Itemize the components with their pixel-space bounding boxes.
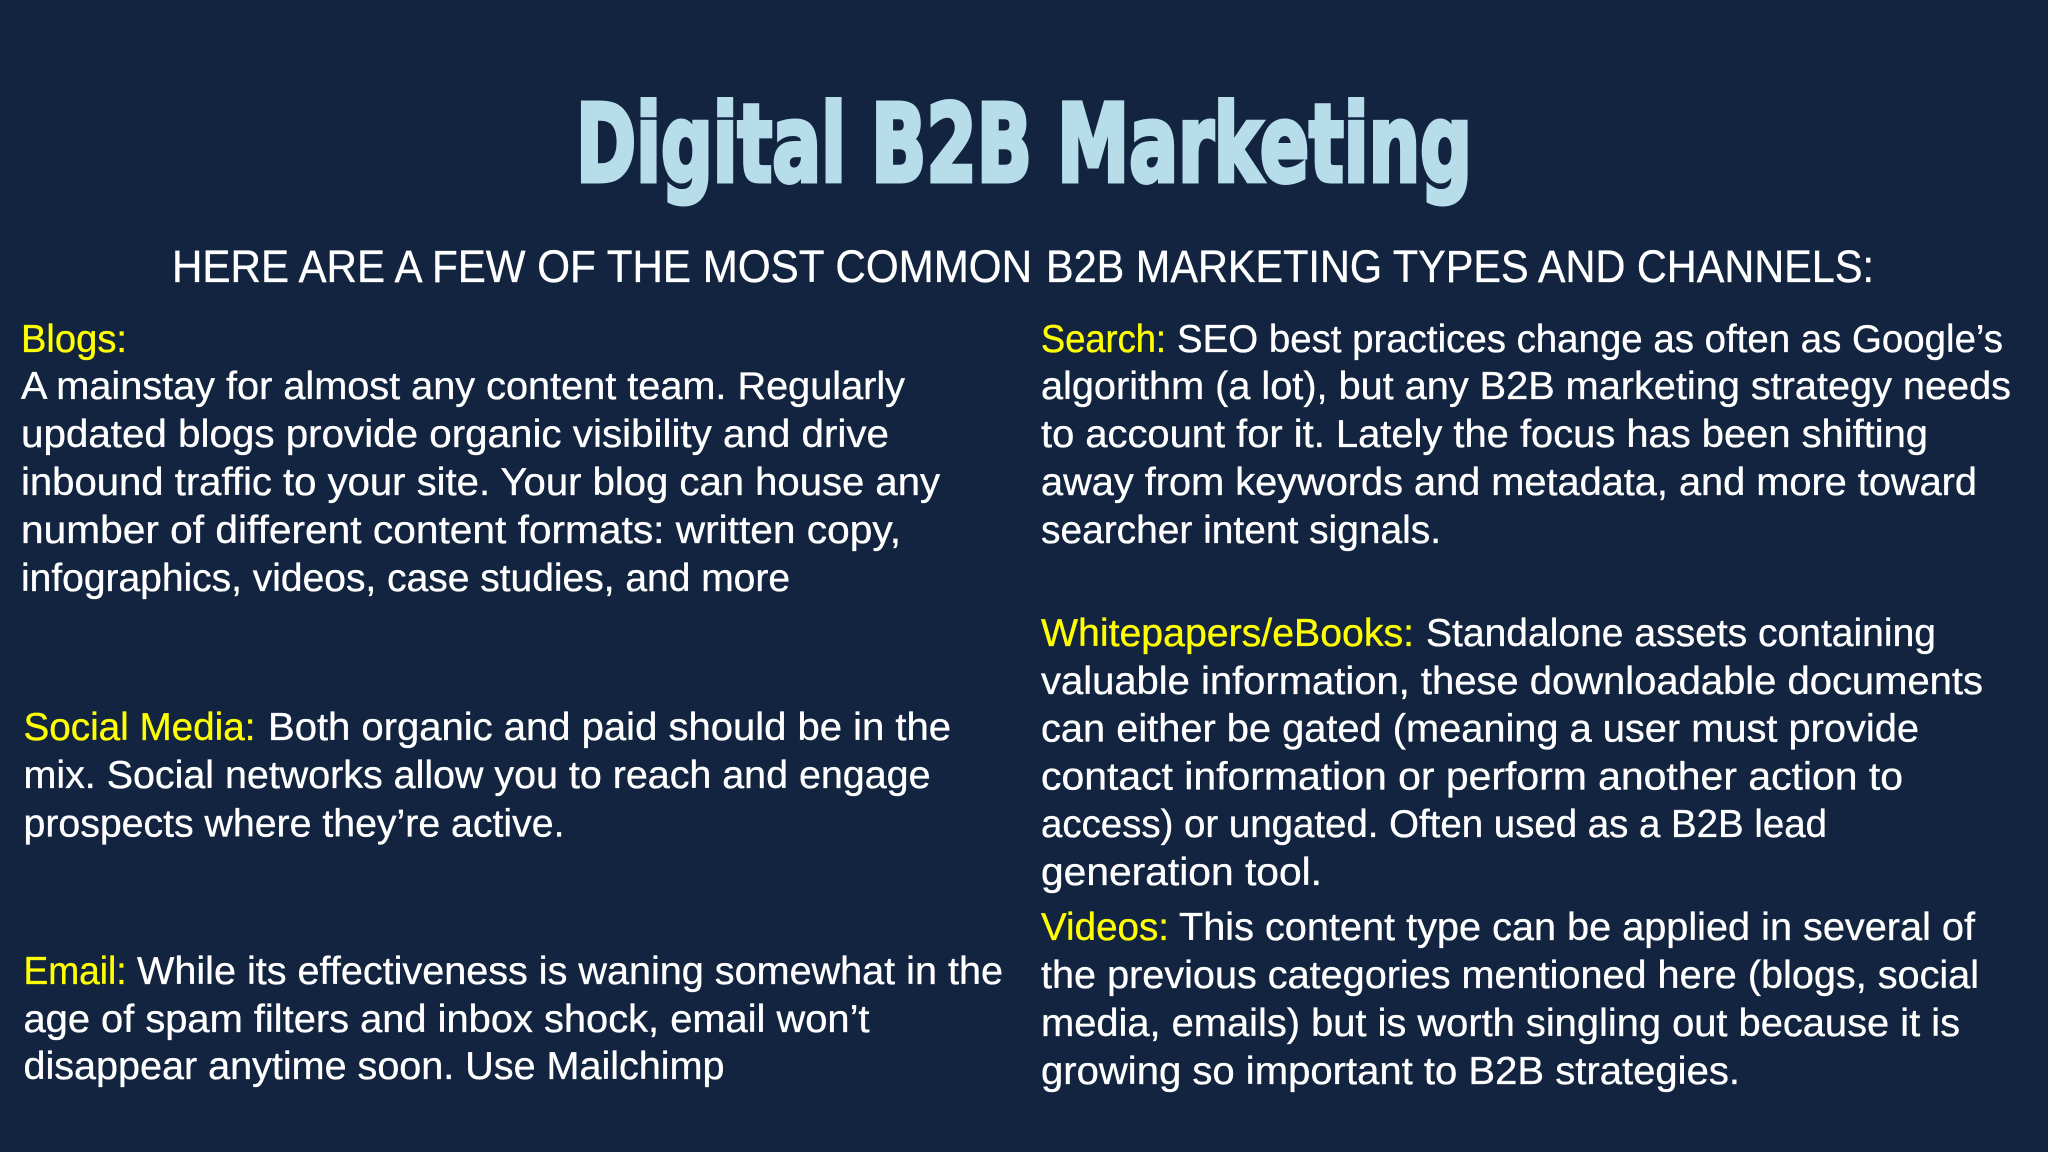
subtitle: B2B MARKETING TYPES AND CHANNELS: (1046, 241, 1874, 292)
body: social media (24, 706, 951, 846)
body: email: disappear anytime soon. Use Mailchimp (24, 1045, 724, 1088)
body: social media: Both organic and paid should be in the (268, 706, 951, 749)
text block: email (24, 950, 1003, 1088)
body: whitepapers and ebooks: generation tool. (1041, 851, 1322, 894)
body: blogs: updated blogs provide organic visibility and drive (21, 413, 889, 456)
body: social media: mix. Social networks allow you to reach and engage (24, 754, 930, 797)
text block: search (1041, 318, 2011, 552)
body: email (24, 950, 1003, 1088)
body: email: age of spam filters and inbox shock, email won’t (24, 998, 870, 1041)
subtitle: HERE ARE A FEW OF THE MOST COMMON (172, 241, 1032, 292)
body: videos: growing so important to B2B strategies. (1041, 1050, 1740, 1093)
heading: videos: Videos: (1041, 906, 1169, 949)
heading: blogs: Blogs: (21, 318, 127, 361)
body: videos: This content type can be applied in several of (1179, 906, 1975, 949)
body: videos: the previous categories mentioned here (blogs, social (1041, 954, 1979, 997)
body: whitepapers and ebooks: contact information or perform another action to (1041, 756, 1903, 798)
text block: whitepapers and ebooks (1041, 612, 1983, 894)
text block: videos (1041, 906, 1979, 1093)
body: search (1041, 318, 2011, 552)
body: social media: prospects where they’re active. (24, 802, 565, 846)
body: whitepapers and ebooks (1041, 612, 1983, 894)
body: search: algorithm (a lot), but any B2B marketing strategy needs (1041, 365, 2011, 408)
body: search: to account for it. Lately the focus has been shifting (1041, 413, 1928, 456)
body: whitepapers and ebooks: access) or ungated. Often used as a B2B lead (1041, 803, 1827, 846)
body: blogs: inbound traffic to your site. Your blog can house any (21, 461, 941, 504)
text block: social media (24, 706, 951, 846)
body: blogs: number of different content formats: written copy, (21, 509, 901, 552)
title: Digital B2B Marketing (576, 83, 1472, 207)
body: whitepapers and ebooks: Standalone assets containing (1426, 612, 1936, 655)
heading: email: Email: (24, 950, 126, 993)
body: search: away from keywords and metadata, and more toward (1041, 461, 1977, 504)
body: blogs: A mainstay for almost any content team. Regularly (21, 365, 906, 408)
heading: social media: Social Media: (24, 706, 256, 749)
subtitle (172, 241, 1874, 292)
body: blogs (21, 365, 941, 600)
body: email: While its effectiveness is waning somewhat in the (137, 950, 1003, 993)
body: search: searcher intent signals. (1041, 509, 1441, 552)
heading: search: Search: (1041, 318, 1166, 361)
body: whitepapers and ebooks: can either be gated (meaning a user must provide (1041, 708, 1919, 750)
body: videos: media, emails) but is worth singling out because it is (1041, 1002, 1960, 1045)
body: videos (1041, 906, 1979, 1093)
body: blogs: infographics, videos, case studies, and more (21, 557, 790, 600)
heading: whitepapers and ebooks: Whitepapers/eBooks: (1041, 612, 1414, 655)
body: whitepapers and ebooks: valuable information, these downloadable documents (1041, 660, 1983, 703)
text block: blogs (21, 318, 941, 600)
body: search: SEO best practices change as often as Google’s (1177, 318, 2003, 361)
